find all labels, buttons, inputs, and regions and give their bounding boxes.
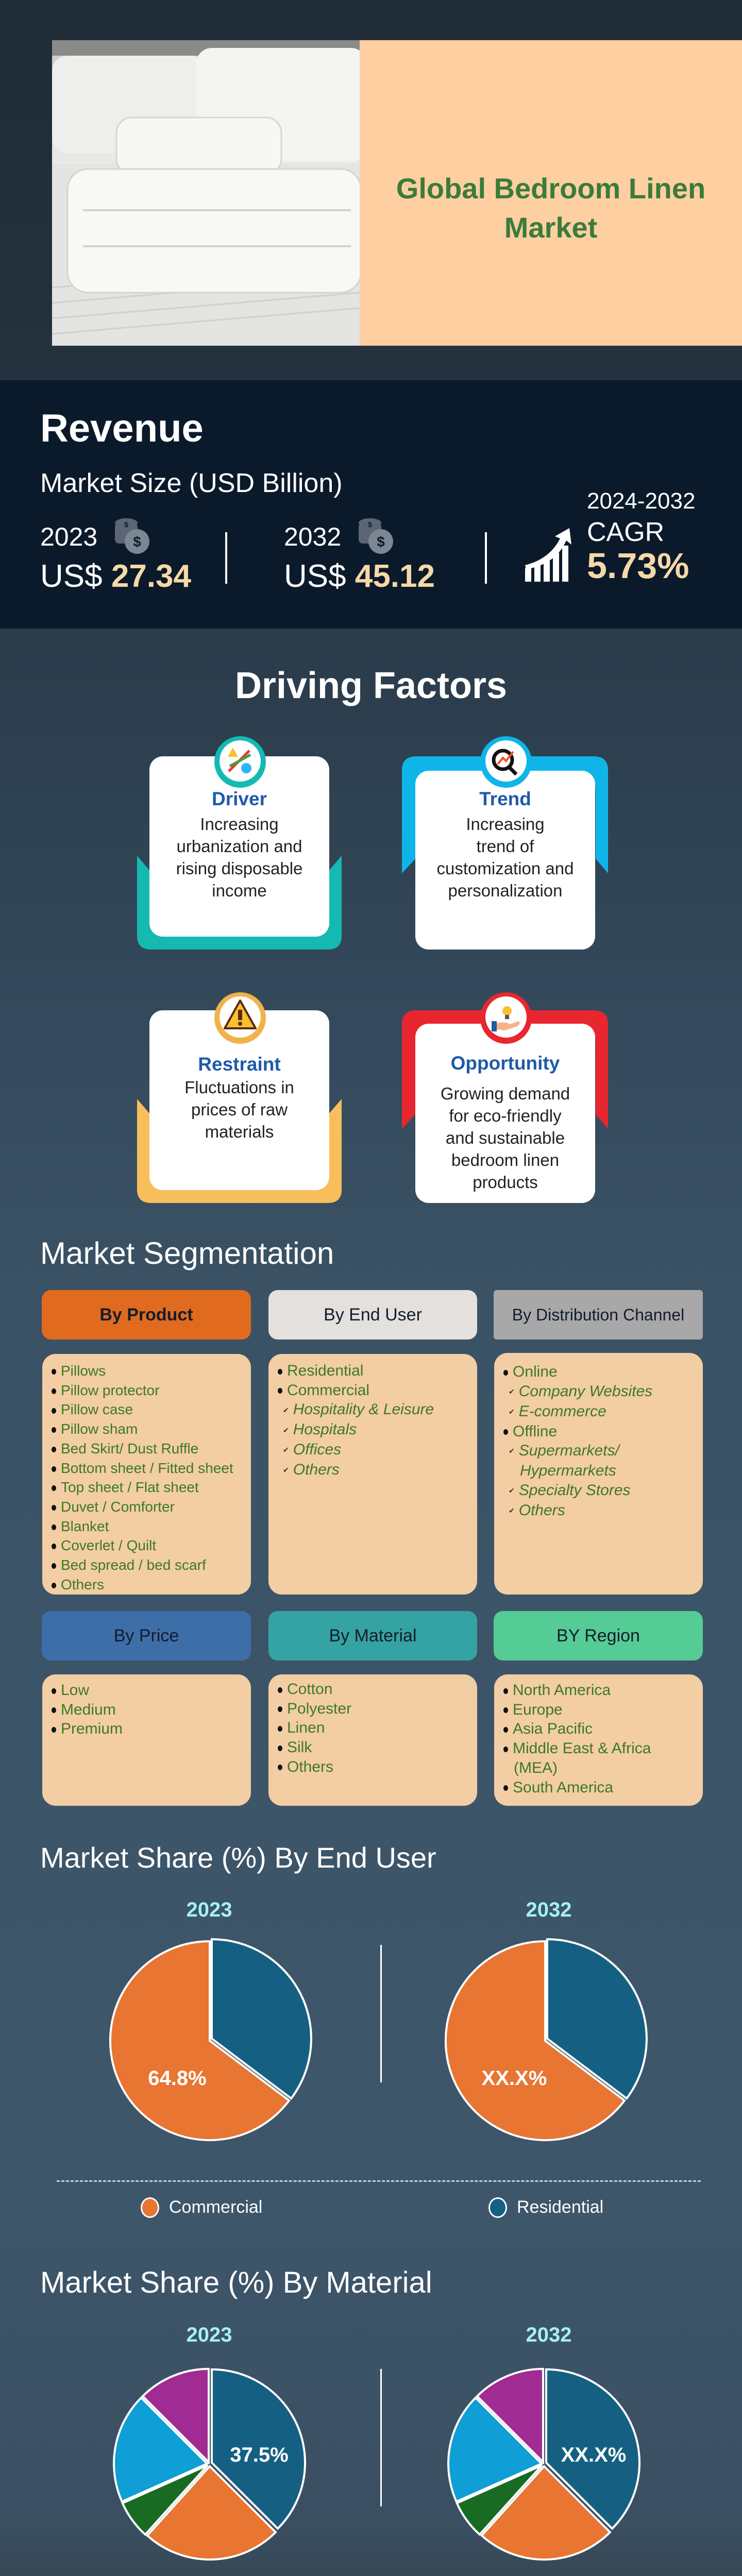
list: distribution channel: Others: [519, 1502, 565, 1519]
panel: trend: Trend: [479, 788, 531, 809]
list: distribution channel: Supermarkets/: [519, 1442, 619, 1459]
segment header: by region: [494, 1611, 703, 1660]
list: region: Europe: [513, 1701, 563, 1718]
list: distribution channel: E-commerce: [519, 1403, 606, 1420]
list: material: Cotton: [287, 1681, 332, 1698]
list: product: Pillow case: [61, 1401, 133, 1417]
panel: driver: rising disposable: [176, 859, 302, 878]
pie chart: end user 2032: XX.X%: [482, 2067, 547, 2090]
list: product: Coverlet / Quilt: [61, 1537, 156, 1553]
panel: driver: [137, 736, 342, 950]
list: distribution channel: Hypermarkets: [520, 1462, 616, 1479]
stat 2023: [40, 518, 191, 594]
pie chart: material 2023: 37.5%: [230, 2444, 289, 2466]
list: product: Bed spread / bed scarf: [61, 1557, 206, 1573]
legend: end user: [57, 2180, 701, 2222]
panel: restraint: [137, 992, 342, 1203]
divider: [485, 532, 487, 584]
panel: opportunity: for eco-friendly: [449, 1106, 562, 1125]
label 2023: 2023: [187, 1899, 232, 1921]
stat 2023: $: [133, 534, 141, 550]
list: product: Top sheet / Flat sheet: [61, 1479, 199, 1495]
title: Market: [504, 211, 597, 244]
icon: warning: [214, 992, 266, 1044]
revenue band: [0, 380, 742, 629]
list: end user: [268, 1354, 477, 1595]
list: region: (MEA): [514, 1759, 558, 1776]
list: region: Asia Pacific: [513, 1720, 593, 1737]
list: material: Silk: [287, 1739, 312, 1756]
stat 2023: US$ 27.34: [40, 558, 191, 594]
heading: market share by end user: Market Share (%) By End User: [40, 1841, 436, 1874]
segment header: by distribution channel: [494, 1290, 703, 1340]
heading: market segmentation: Market Segmentation: [40, 1236, 334, 1270]
segment header: by material: By Material: [329, 1626, 417, 1646]
list: end user: Hospitals: [293, 1421, 357, 1438]
list: product: Pillow protector: [61, 1382, 159, 1398]
list: material: [268, 1674, 477, 1806]
panel: restraint: Fluctuations in: [184, 1078, 294, 1097]
icon: driver: [214, 736, 266, 788]
stat 2032: $: [368, 520, 372, 529]
market size label: Market Size (USD Billion): [40, 468, 343, 498]
heading: driving factors: Driving Factors: [235, 665, 507, 706]
list: material: Polyester: [287, 1700, 351, 1717]
panel: restraint: Restraint: [198, 1054, 281, 1075]
label 2023: 2023: [187, 2324, 232, 2346]
panel: restraint: prices of raw: [191, 1100, 288, 1119]
panel: driver: Driver: [212, 788, 267, 809]
panel: opportunity: products: [473, 1173, 538, 1192]
CAGR: CAGR: [587, 517, 664, 547]
panel: trend: trend of: [477, 837, 534, 856]
divider: [380, 1945, 382, 2082]
list: distribution channel: Online: [513, 1363, 558, 1380]
stat 2023: $: [124, 520, 128, 529]
list: distribution channel: Offline: [513, 1423, 557, 1440]
panel: trend: personalization: [448, 881, 562, 900]
segment header: by material: [268, 1611, 477, 1660]
stat 2032: US$ 45.12: [284, 558, 435, 594]
list: price: [42, 1674, 251, 1806]
stat 2032: [284, 518, 435, 594]
heading: market share by material: Market Share (%) By Material: [40, 2266, 432, 2299]
icon: growth chart arrow: [525, 528, 571, 582]
list: region: Middle East & Africa: [513, 1740, 651, 1757]
legend: end user: Residential: [517, 2197, 603, 2217]
icon: trend magnifier: [481, 736, 531, 788]
CAGR: 2024-2032: [587, 488, 695, 514]
panel: opportunity: bedroom linen: [451, 1150, 559, 1170]
list: product: Pillow sham: [61, 1421, 138, 1437]
list: material: Linen: [287, 1719, 325, 1736]
list: product: [42, 1354, 251, 1595]
list: product: Bed Skirt/ Dust Ruffle: [61, 1440, 198, 1456]
list: end user: Hospitality & Leisure: [293, 1401, 434, 1418]
icon: idea in hand: [481, 992, 531, 1044]
list: product: Pillows: [61, 1363, 106, 1379]
label 2032: 2032: [526, 1899, 571, 1921]
pie chart: material 2032: [447, 2368, 641, 2561]
panel: opportunity: and sustainable: [446, 1128, 565, 1147]
list: product: Duvet / Comforter: [61, 1499, 175, 1515]
panel: opportunity: Opportunity: [451, 1053, 560, 1074]
list: distribution channel: Company Websites: [519, 1383, 652, 1400]
stat 2032: 2032: [284, 522, 341, 551]
segment header: by distribution channel: By Distribution Channel: [512, 1306, 684, 1324]
panel: trend: customization and: [437, 859, 574, 878]
pie chart: end user 2023: 64.8%: [148, 2067, 207, 2090]
list: end user: Offices: [293, 1441, 341, 1458]
segmentation grid: [42, 1290, 703, 1806]
segment header: by product: [42, 1290, 251, 1340]
header photo: folded towels on bed: [52, 40, 360, 346]
divider: [225, 532, 227, 584]
title: [396, 172, 705, 244]
panel: opportunity: [402, 992, 608, 1203]
CAGR: 5.73%: [587, 546, 689, 586]
CAGR: [587, 488, 695, 586]
panel: driver: income: [212, 881, 267, 900]
list: region: [494, 1674, 703, 1806]
list: product: Bottom sheet / Fitted sheet: [61, 1460, 233, 1476]
list: product: Others: [61, 1577, 104, 1592]
list: end user: Others: [293, 1461, 340, 1478]
list: end user: Commercial: [287, 1382, 369, 1399]
divider: [380, 2369, 382, 2506]
pie chart: material 2032: XX.X%: [561, 2444, 626, 2466]
segment header: by region: BY Region: [556, 1626, 640, 1646]
segment header: by price: By Price: [114, 1626, 179, 1646]
legend: end user: Commercial: [169, 2197, 262, 2217]
segment header: by product: By Product: [99, 1304, 193, 1324]
pie chart: material 2023: [113, 2368, 306, 2561]
list: distribution channel: [494, 1353, 703, 1595]
segment header: by end user: [268, 1290, 477, 1340]
list: distribution channel: Specialty Stores: [519, 1482, 631, 1499]
list: price: Premium: [61, 1720, 123, 1737]
panel: trend: [402, 736, 608, 950]
panel: driver: urbanization and: [176, 837, 302, 856]
list: price: Low: [61, 1682, 89, 1699]
list: price: Medium: [61, 1701, 116, 1718]
panel: trend: Increasing: [466, 815, 545, 834]
pie chart: end user 2032: [444, 1938, 648, 2141]
panel: driver: Increasing: [200, 815, 279, 834]
pie chart: end user 2023: [109, 1938, 312, 2141]
panel: restraint: materials: [205, 1122, 274, 1141]
list: product: Blanket: [61, 1518, 109, 1534]
title: Global Bedroom Linen: [396, 172, 705, 205]
list: region: North America: [513, 1682, 611, 1699]
stat 2032: $: [377, 534, 385, 550]
panel: opportunity: Growing demand: [441, 1084, 570, 1103]
segment header: by end user: By End User: [324, 1304, 422, 1324]
segment header: by price: [42, 1611, 251, 1660]
list: end user: Residential: [287, 1362, 363, 1379]
label 2032: 2032: [526, 2324, 571, 2346]
list: region: South America: [513, 1779, 613, 1796]
revenue heading: Revenue: [40, 406, 204, 450]
list: material: Others: [287, 1758, 333, 1775]
stat 2023: 2023: [40, 522, 97, 551]
title panel: [360, 40, 742, 346]
